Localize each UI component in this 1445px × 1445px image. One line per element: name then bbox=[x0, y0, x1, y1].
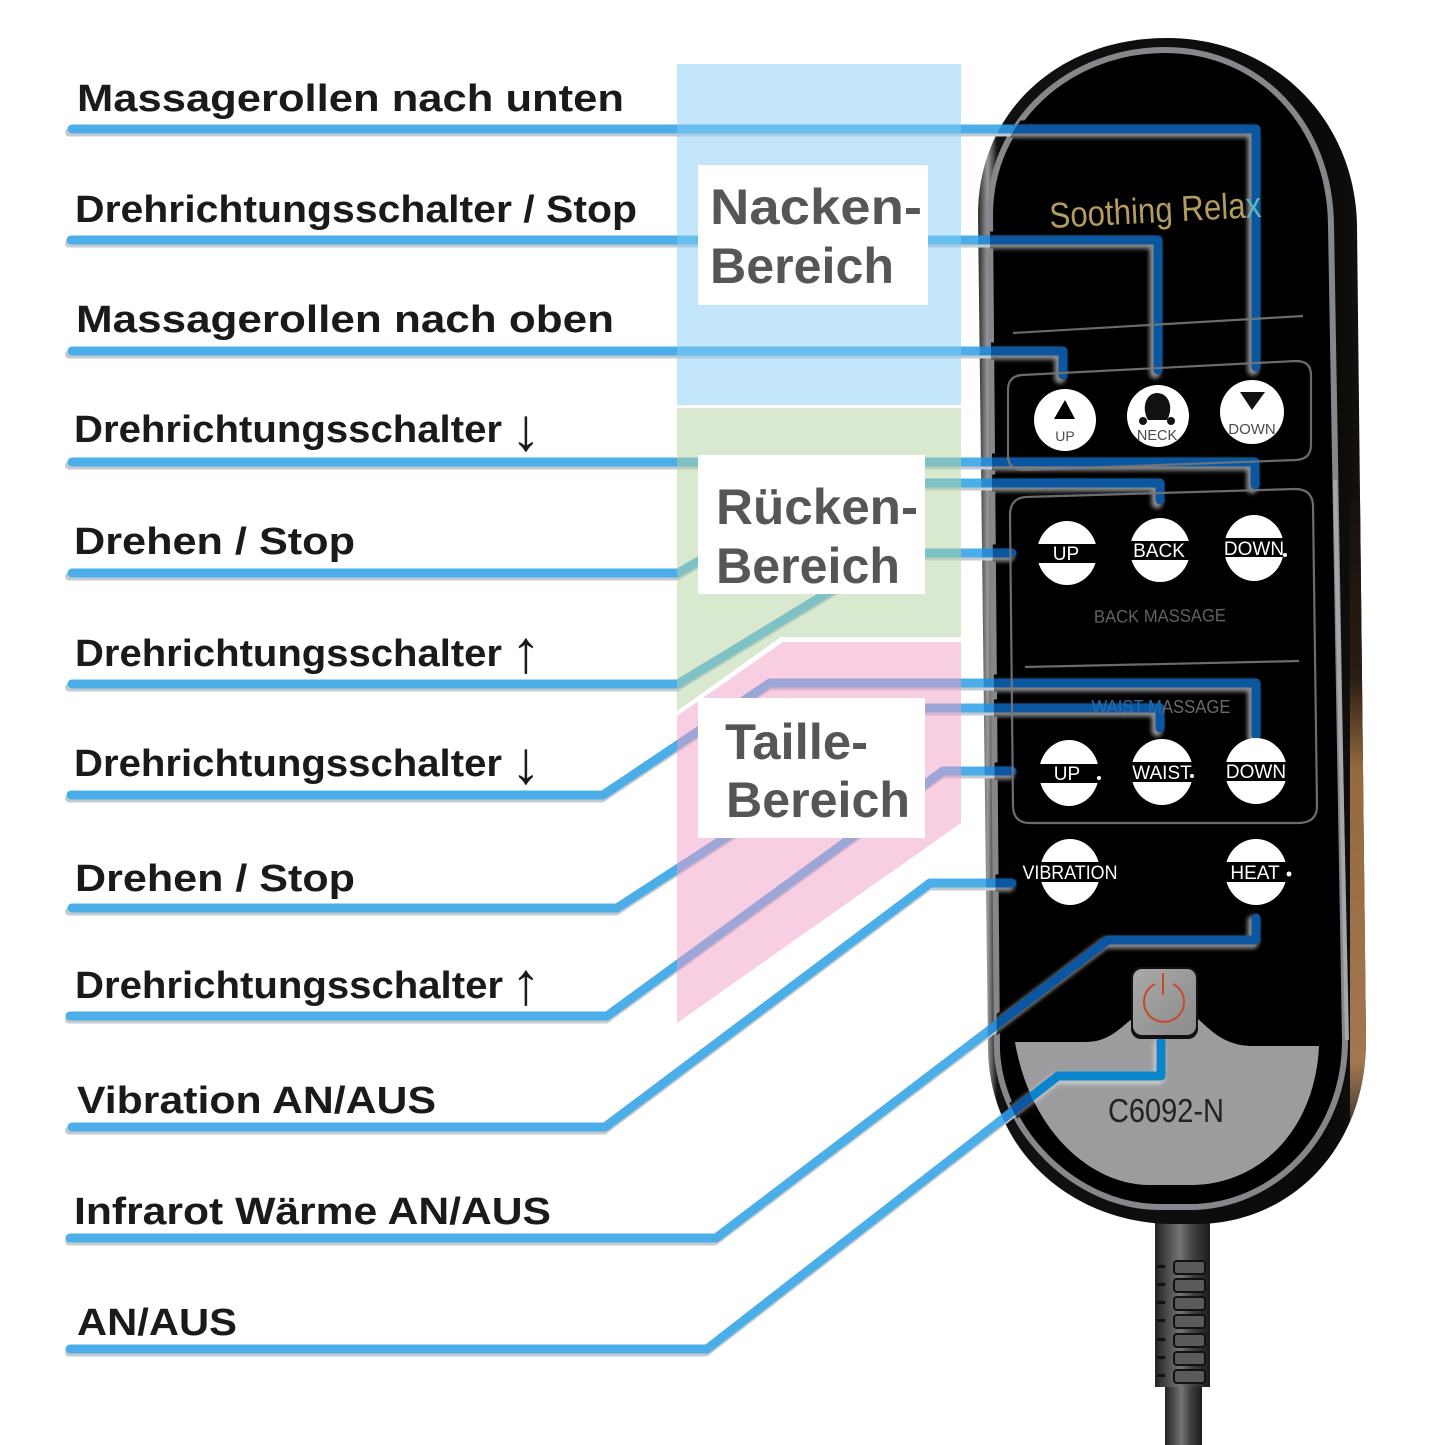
label: Drehrichtungsschalter up, waist: ↑ bbox=[511, 950, 541, 1017]
heading box: Taille-Bereich: Bereich bbox=[726, 772, 910, 828]
model plate bbox=[1015, 1018, 1319, 1185]
waist massage buttons bbox=[1039, 738, 1287, 806]
line: Drehrichtungsschalter down, waist bbox=[71, 683, 1256, 795]
back massage buttons: BACK bbox=[1133, 541, 1185, 562]
back massage buttons: UP bbox=[1053, 544, 1079, 565]
line: Drehrichtungsschalter down, neck bbox=[72, 462, 1255, 485]
back massage buttons bbox=[1037, 515, 1287, 585]
zone band: waist bbox=[677, 642, 961, 1023]
heading box: Nacken-Bereich: Bereich bbox=[710, 238, 894, 294]
heading box: Ruecken-Bereich bbox=[698, 455, 925, 594]
label: Massagerollen nach unten: Massagerollen nach unten bbox=[77, 78, 624, 120]
line: Drehrichtungsschalter / Stop bbox=[71, 240, 1158, 370]
button: neck bbox=[1127, 385, 1189, 447]
button: up: UP bbox=[1055, 428, 1075, 444]
label: Drehrichtungsschalter down: ↓ bbox=[511, 396, 541, 463]
vibration button: VIBRATION bbox=[1022, 863, 1118, 884]
leader lines over the remote bbox=[978, 120, 1319, 1185]
zone band: neck bbox=[677, 64, 961, 405]
heading box: Taille-Bereich bbox=[698, 698, 925, 838]
label: Drehrichtungsschalter down, waist: ↓ bbox=[511, 729, 541, 796]
zone band: back bbox=[677, 408, 961, 711]
button: up bbox=[1034, 389, 1096, 451]
heading box: Nacken-Bereich: Nacken- bbox=[710, 179, 922, 235]
waist massage buttons: WAIST bbox=[1132, 763, 1192, 784]
back massage caption: BACK MASSAGE bbox=[1094, 605, 1226, 627]
label: Infrarot Waerme AN/AUS: Infrarot Wärme AN/AUS bbox=[74, 1191, 551, 1233]
label: Drehrichtungsschalter up, waist bbox=[75, 950, 541, 1017]
line: Massagerollen nach oben bbox=[72, 351, 1063, 375]
brand name: Soothing Relax bbox=[1048, 184, 1262, 236]
heat button: HEAT bbox=[1230, 863, 1280, 884]
label: Drehrichtungsschalter down, waist: Drehrichtungsschalter bbox=[74, 743, 502, 785]
line: Drehrichtungsschalter up, waist bbox=[70, 771, 1012, 1016]
heading box: Taille-Bereich: Taille- bbox=[725, 714, 868, 770]
label: Drehrichtungsschalter down: Drehrichtungsschalter bbox=[74, 409, 502, 451]
line: Drehen / Stop, waist bbox=[72, 708, 1160, 908]
button: down: DOWN bbox=[1228, 421, 1276, 438]
back massage buttons: DOWN bbox=[1224, 539, 1284, 560]
line: Massagerollen nach unten bbox=[72, 129, 1256, 367]
label: Massagerollen nach oben: Massagerollen nach oben bbox=[76, 299, 614, 341]
label: Drehrichtungsschalter up: Drehrichtungsschalter bbox=[75, 633, 502, 675]
label: Drehrichtungsschalter down bbox=[74, 396, 541, 463]
waist massage caption: WAIST MASSAGE bbox=[1092, 697, 1230, 717]
line: Drehen / Stop, back bbox=[72, 483, 1160, 573]
cable bbox=[1155, 1218, 1210, 1445]
heading box: Ruecken-Bereich: Rücken- bbox=[716, 479, 918, 535]
button: down bbox=[1220, 380, 1284, 444]
heading box: Nacken-Bereich bbox=[698, 165, 928, 305]
label: Drehrichtungsschalter down, waist bbox=[74, 729, 541, 796]
panel markings bbox=[1008, 316, 1317, 823]
line: Drehrichtungsschalter up, back bbox=[72, 553, 1012, 684]
vibration button bbox=[1020, 839, 1120, 905]
heading box: Ruecken-Bereich: Bereich bbox=[716, 538, 900, 594]
label: Drehen / Stop, waist: Drehen / Stop bbox=[75, 858, 355, 900]
label: Vibration AN/AUS: Vibration AN/AUS bbox=[77, 1080, 436, 1122]
power button bbox=[1131, 967, 1198, 1039]
button: neck: NECK bbox=[1137, 428, 1177, 444]
remote control body bbox=[978, 38, 1370, 1224]
leader line shadows bbox=[69, 132, 1255, 1352]
label: AN/AUS: AN/AUS bbox=[77, 1302, 237, 1344]
label: Drehen / Stop: Drehen / Stop bbox=[74, 521, 355, 563]
line: Infrarot Waerme bbox=[70, 918, 1256, 1238]
waist massage buttons: UP bbox=[1054, 764, 1080, 785]
waist massage buttons: DOWN bbox=[1226, 762, 1286, 783]
leader lines bbox=[70, 129, 1256, 1349]
label: Drehrichtungsschalter up, waist: Drehrichtungsschalter bbox=[75, 965, 503, 1007]
label: Drehrichtungsschalter up bbox=[75, 618, 541, 685]
model number: C6092-N bbox=[1108, 1092, 1224, 1129]
line: Vibration bbox=[72, 883, 1012, 1127]
label: Drehrichtungsschalter / Stop: Drehrichtungsschalter / Stop bbox=[75, 189, 637, 231]
heat button bbox=[1225, 839, 1292, 905]
line: AN/AUS bbox=[70, 1042, 1161, 1349]
label: Drehrichtungsschalter up: ↑ bbox=[511, 618, 541, 685]
